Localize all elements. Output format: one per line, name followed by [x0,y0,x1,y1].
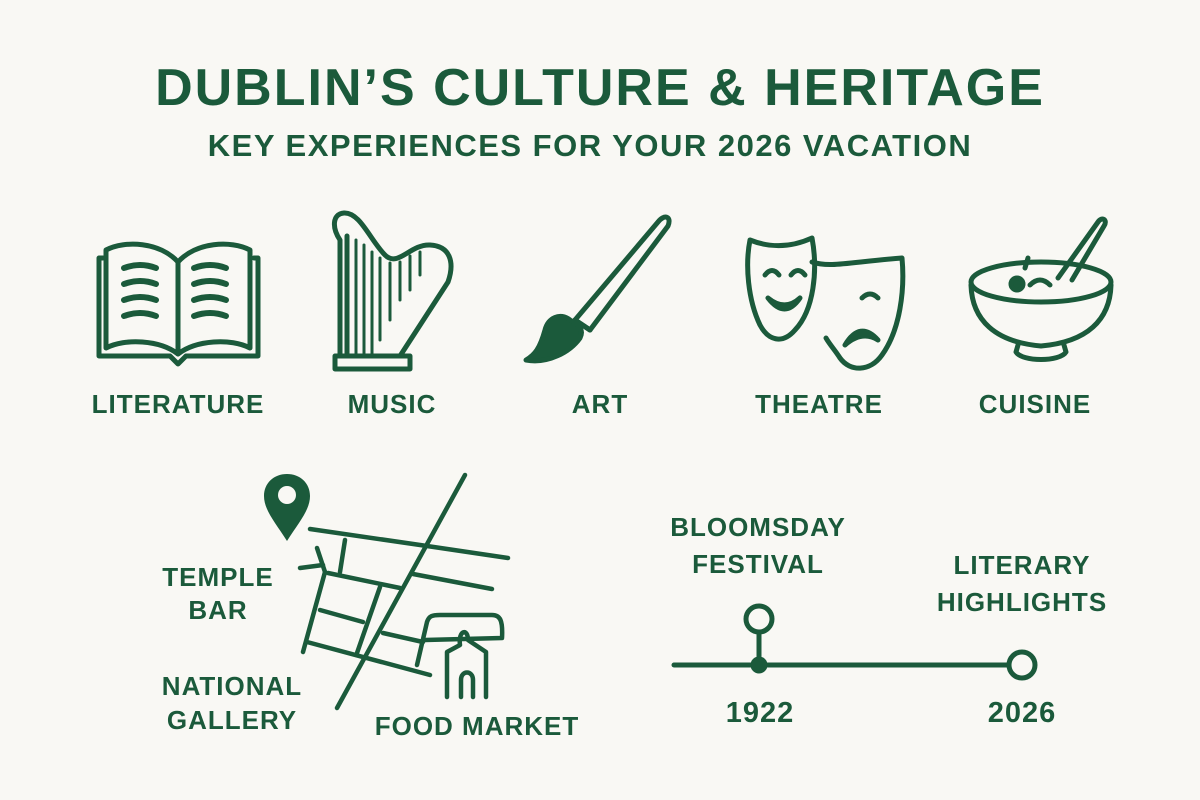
map [264,474,508,708]
icon: market building [447,632,486,697]
timeline label: bloomsday: BLOOMSDAY [670,512,846,542]
icon: paintbrush [526,217,669,361]
year 1922: 1922 [726,697,794,729]
timeline label: bloomsday [670,512,846,579]
icon: theatre masks [748,238,903,368]
map label: temple bar [162,562,274,625]
title: DUBLIN’S CULTURE & HERITAGE [155,59,1045,117]
map label: temple bar: TEMPLE [162,562,274,592]
label: theatre: THEATRE [755,389,883,419]
label: music: MUSIC [348,389,436,419]
map label: national gallery: GALLERY [167,705,297,735]
map label: food market: FOOD MARKET [375,711,579,741]
year 2026: 2026 [988,697,1056,729]
icon: location pin [264,474,310,541]
timeline label: literary [937,550,1107,617]
timeline label: literary: LITERARY [953,550,1091,580]
label: literature: LITERATURE [92,389,264,419]
map label: national gallery [162,671,302,735]
timeline label: literary: HIGHLIGHTS [937,587,1107,617]
map label: temple bar: BAR [188,595,248,625]
map label: national gallery: NATIONAL [162,671,302,701]
icon: harp [334,213,451,369]
subtitle: KEY EXPERIENCES FOR YOUR 2026 VACATION [208,128,972,163]
timeline [674,606,1035,678]
icon: soup bowl [971,219,1111,360]
timeline label: bloomsday: FESTIVAL [692,549,824,579]
icon: book [99,244,258,364]
label: art: ART [572,389,628,419]
label: cuisine: CUISINE [979,389,1091,419]
